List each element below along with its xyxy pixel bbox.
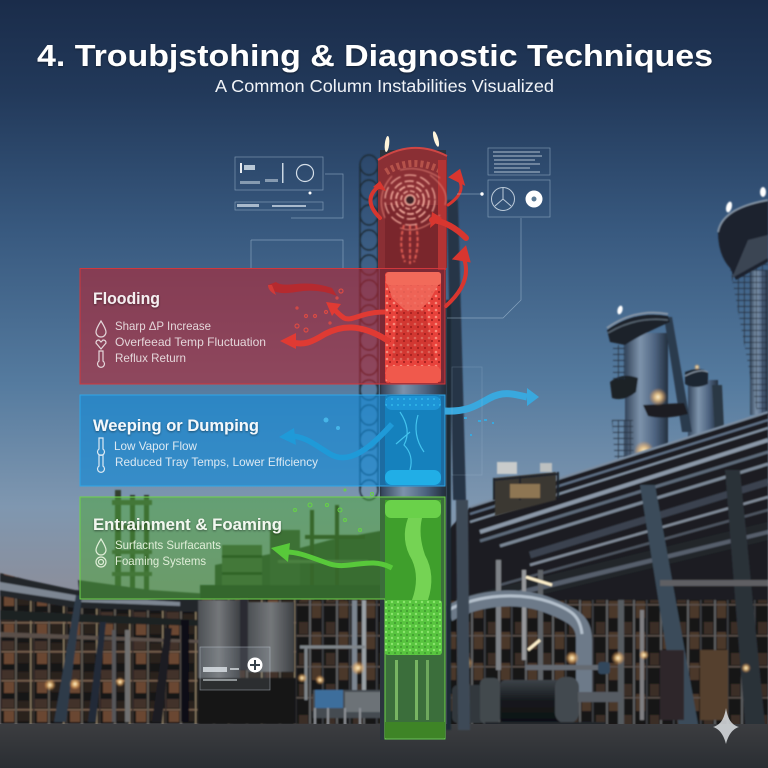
background: central vessels and equipment: [198, 598, 385, 736]
side platforms: [610, 376, 638, 399]
panel: entrainment and foaming: [80, 497, 445, 739]
flooding panel background: [80, 268, 445, 384]
flooding bubbles: [295, 289, 343, 332]
panel: flooding: [80, 268, 445, 384]
flooding symptoms list: Overfeead Temp Fluctuation: [115, 335, 266, 349]
background: distillation tower B far right: [718, 187, 768, 415]
background: refinery right section: [44, 412, 768, 735]
background: distillation tower A: [607, 305, 725, 465]
entrainment symptoms list: [115, 538, 221, 568]
flooding icons: [96, 321, 106, 367]
large elbow pipe: [448, 598, 584, 700]
entrainment icons: [96, 539, 106, 567]
top platform: [607, 315, 670, 345]
background: refinery left section: [0, 490, 385, 724]
HUD text lines: [493, 152, 542, 172]
entrainment panel background: [80, 497, 445, 739]
arrow: weeping flow outward: [445, 388, 539, 435]
weeping symptoms list: Low Vapor Flow: [114, 439, 197, 453]
weeping icons: [98, 438, 104, 472]
HUD gear button: [526, 190, 542, 208]
HUD panel: lower: [200, 647, 270, 690]
weeping panel heading: Weeping or Dumping: [93, 416, 259, 435]
arrow: weeping flow to panel: [279, 418, 392, 458]
weeping panel background: [80, 395, 445, 486]
sloped pipe rack: [470, 412, 768, 585]
arrow: flooding flow middle: [326, 302, 385, 319]
entrainment symptoms list: Surfacnts Surfacants: [115, 538, 221, 552]
flooding symptoms list: Sharp ΔP Increase: [115, 319, 211, 333]
small rear tower: [688, 380, 718, 450]
refinery lights: [44, 650, 751, 691]
HUD bars: [240, 163, 242, 173]
HUD clock gauge: [492, 188, 514, 210]
subtitle: A Common Column Instabilities Visualized: [215, 76, 554, 96]
rack columns: [640, 485, 700, 735]
column zone: weeping tray section: [385, 395, 441, 485]
arrow: flooding flow lower: [280, 327, 390, 349]
weeping symptoms list: [114, 439, 318, 469]
HUD panel: upper left: [235, 157, 343, 268]
flooding panel heading: Flooding: [93, 290, 160, 308]
weeping symptoms list: Reduced Tray Temps, Lower Efficiency: [115, 455, 318, 469]
background: ground: [0, 724, 768, 768]
title: 4. Troubjstohing & Diagnostic Techniques: [37, 39, 713, 73]
column zone: flooded tray section: [385, 272, 441, 383]
panel: weeping or dumping: [80, 395, 445, 486]
icon: sparkle watermark: [713, 708, 739, 744]
service ladder: [360, 155, 378, 500]
entrainment panel heading: Entrainment & Foaming: [93, 515, 282, 534]
arrow: flooding wave upper: [268, 282, 337, 296]
entrainment symptoms list: Foaming Systems: [115, 554, 206, 568]
distillation column: [360, 131, 470, 740]
metallic joints between zones: [381, 384, 445, 497]
plant structure seen behind green panel: [78, 490, 385, 600]
side pipes: [446, 200, 470, 730]
highlights: [649, 388, 667, 406]
column top red section: [378, 131, 447, 270]
riser pipe: [664, 317, 692, 432]
foaming bubbles: [294, 489, 374, 532]
red curved arrows on column top: [370, 172, 468, 306]
column zone: foaming tray section: [385, 500, 445, 738]
column shell: [380, 150, 446, 740]
vortex swirl: [381, 169, 446, 264]
main shell: [625, 333, 668, 465]
arrow: foaming flow to panel: [271, 543, 392, 568]
flooding symptoms list: [115, 319, 266, 365]
background: small rooftop unit: [494, 462, 558, 516]
flooding symptoms list: Reflux Return: [115, 351, 186, 365]
HUD gauge: [296, 164, 314, 182]
motor: [452, 662, 622, 730]
HUD panel: upper right: [447, 148, 550, 475]
